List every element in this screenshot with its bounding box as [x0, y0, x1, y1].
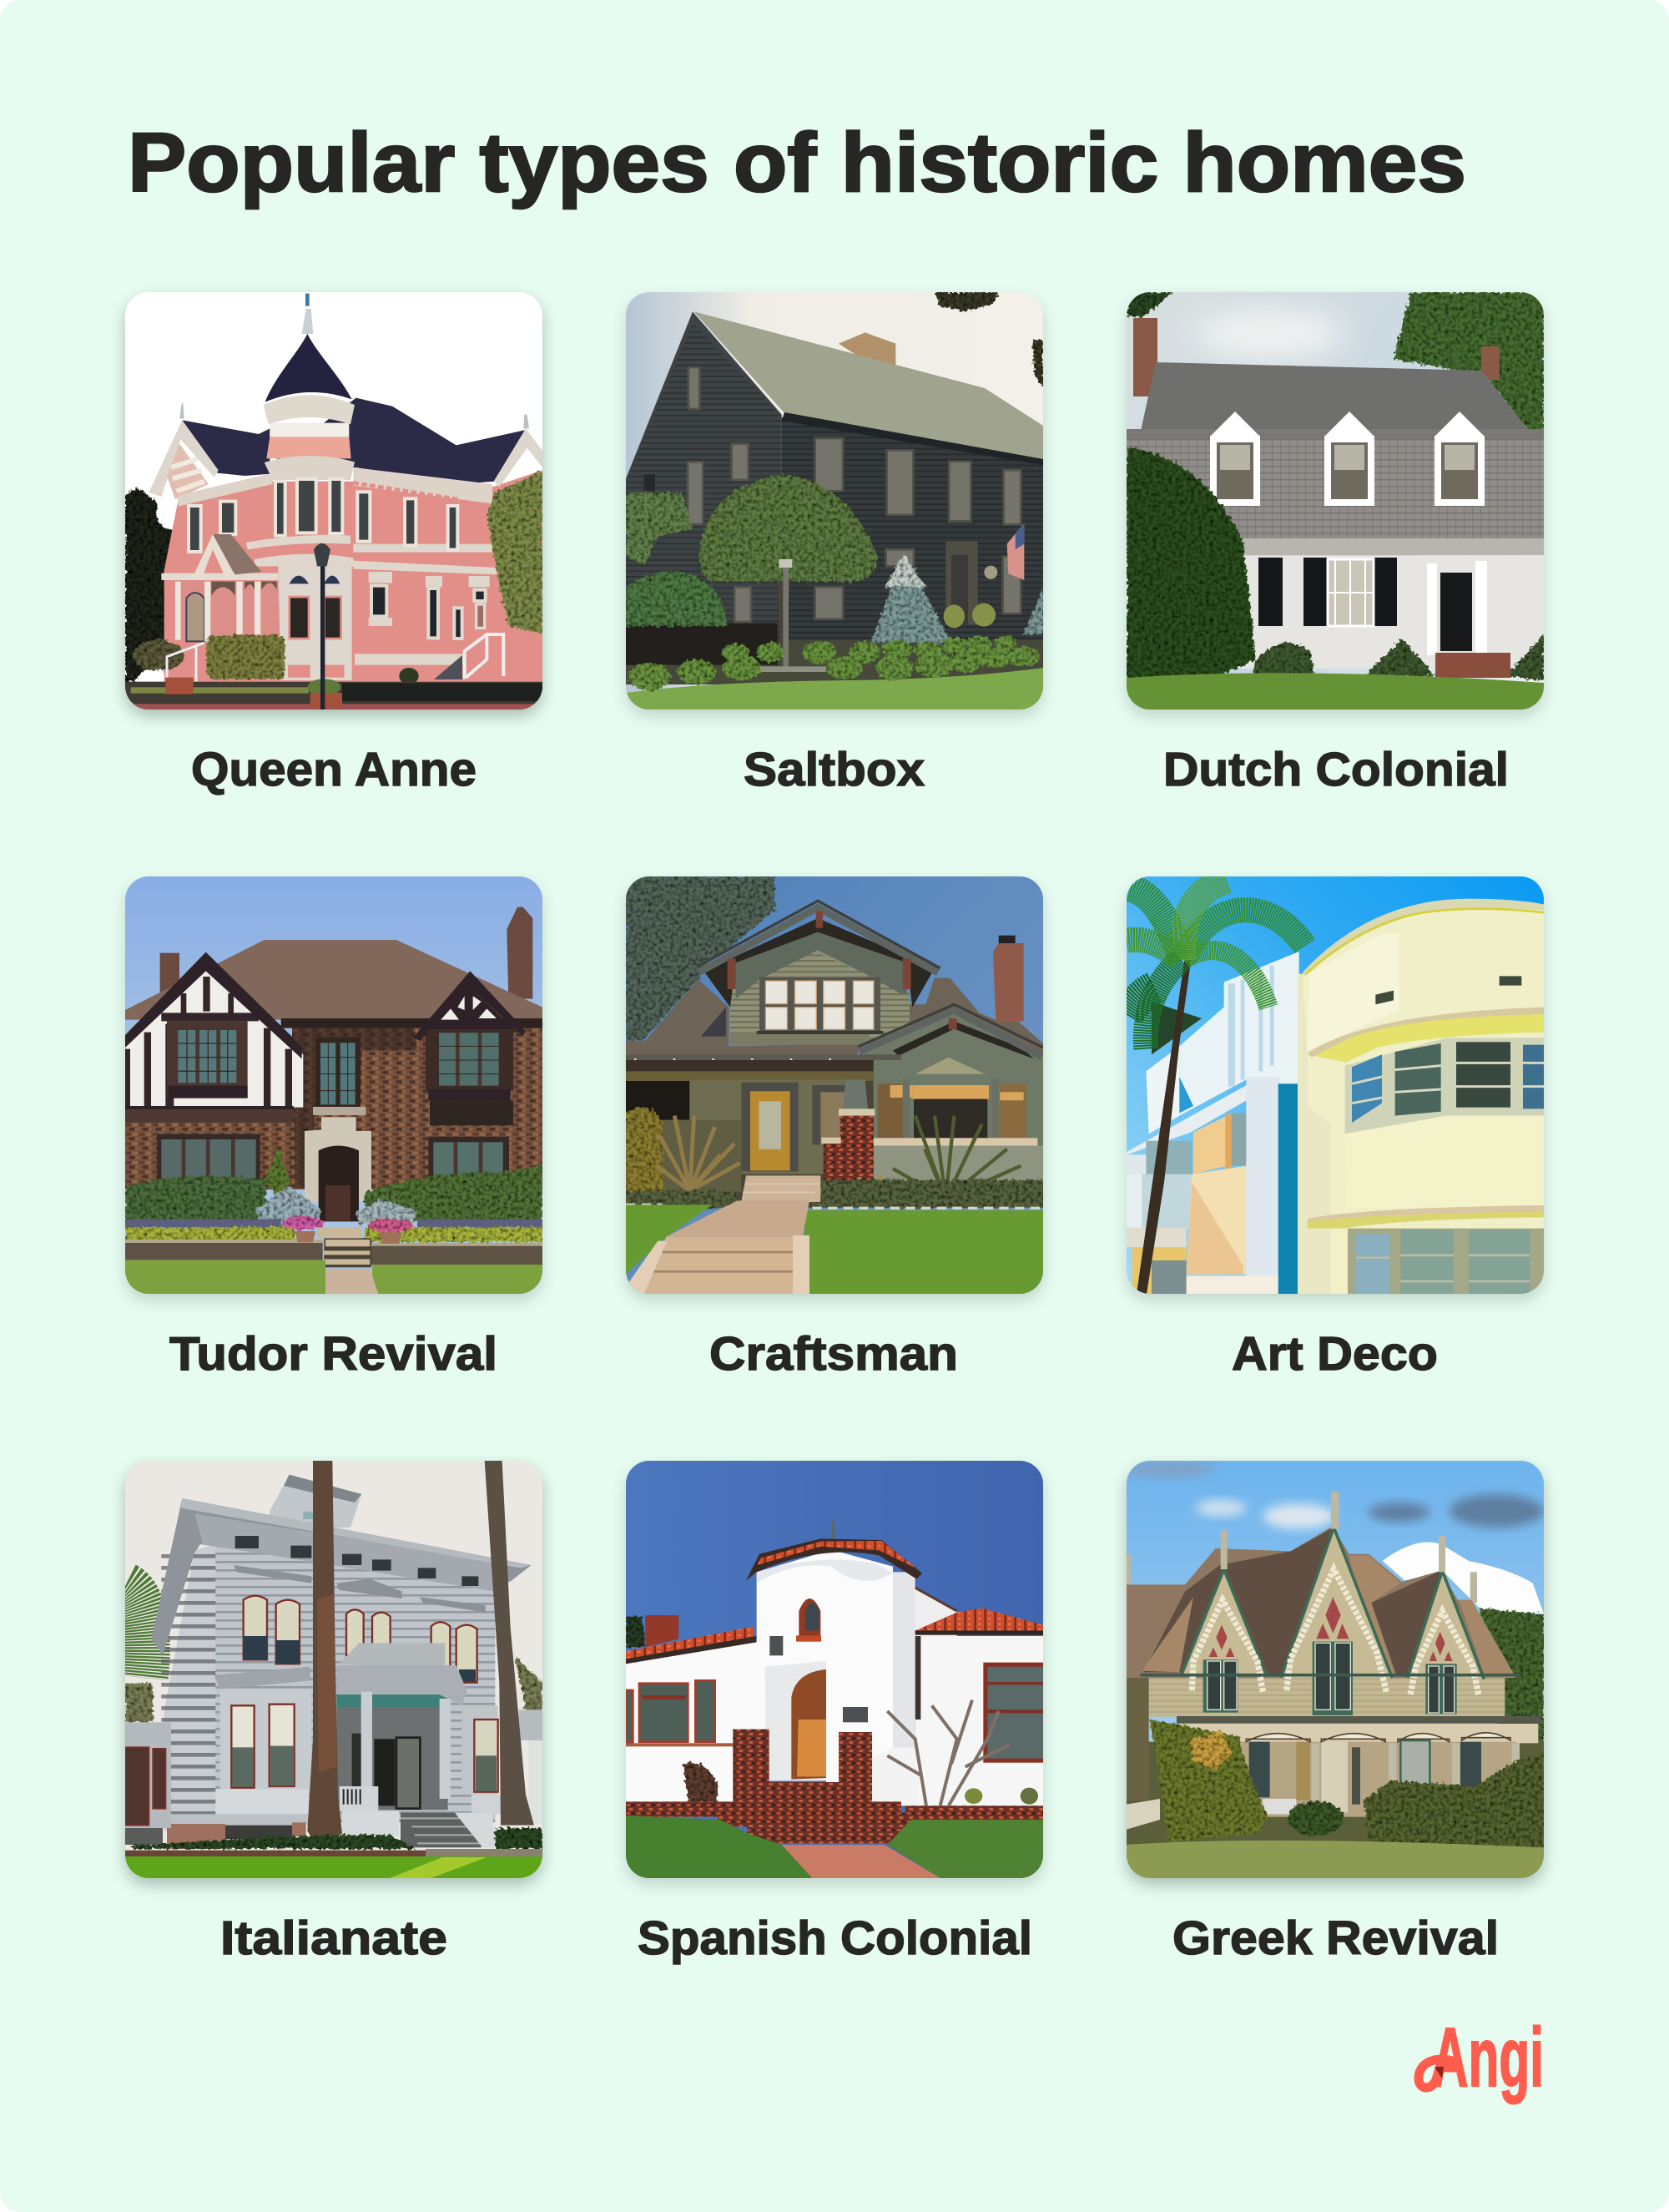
panel: Dutch Colonial	[1127, 292, 1544, 796]
photo: Greek Revival house	[1121, 1461, 1544, 1878]
photo: Italianate house	[125, 1461, 542, 1878]
panel: Spanish Colonial	[626, 1461, 1043, 1965]
panel: Saltbox	[626, 292, 1043, 796]
label: Craftsman	[709, 1327, 958, 1381]
panel: Tudor Revival	[125, 876, 542, 1381]
panel: Craftsman	[626, 876, 1043, 1381]
label: Queen Anne	[191, 743, 476, 796]
label: Spanish Colonial	[638, 1912, 1032, 1965]
panel: Greek Revival	[1121, 1461, 1544, 1965]
photo: Craftsman house	[626, 876, 1043, 1294]
photo: Tudor Revival house	[125, 876, 542, 1294]
photo: Spanish Colonial house	[626, 1461, 1043, 1878]
title: Popular types of historic homes	[128, 116, 1466, 210]
photo: Queen Anne house	[125, 292, 542, 710]
photo: Dutch Colonial house	[1127, 292, 1544, 710]
panel: Queen Anne	[125, 292, 542, 796]
panel: Italianate	[125, 1461, 542, 1965]
label: Art Deco	[1232, 1327, 1438, 1381]
label: Tudor Revival	[169, 1327, 497, 1381]
photo: Art Deco building	[1127, 876, 1544, 1294]
logo: Angi: Angi	[1432, 2011, 1544, 2104]
panel: Art Deco	[1127, 876, 1544, 1381]
logo: Angi	[1419, 2011, 1544, 2104]
label: Italianate	[220, 1912, 447, 1965]
photo: Saltbox house	[626, 292, 1043, 710]
label: Dutch Colonial	[1163, 743, 1509, 796]
label: Saltbox	[744, 743, 925, 796]
label: Greek Revival	[1172, 1912, 1499, 1965]
